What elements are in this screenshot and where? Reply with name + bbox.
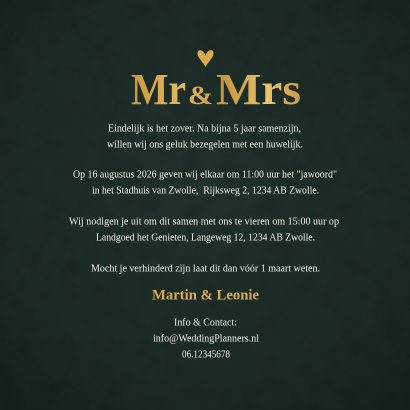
text block: ceremony details: Op 16 augustus 2026 geven wij elkaar om 11:00 uur het "jawoord" xyxy=(73,170,337,180)
text block: contact: 06.12345678 xyxy=(182,350,230,360)
text block: ceremony details: in het Stadhuis van Zwolle, Rijksweg 2, 1234 AB Zwolle. xyxy=(92,186,319,196)
text block: ceremony details xyxy=(73,170,337,196)
text block: party details xyxy=(69,216,339,244)
text block: contact xyxy=(153,318,259,360)
title: Mr & Mrs xyxy=(131,65,301,114)
names: Martin & Leonie: Martin & Leonie xyxy=(152,288,260,304)
text block: announcement xyxy=(107,124,303,150)
text block: announcement: willen wij ons geluk bezegelen met een huwelijk. xyxy=(107,140,303,150)
text block: contact: Info & Contact: xyxy=(174,318,237,328)
text block: party details: Landgoed het Genieten, Langeweg 12, 1234 AB Zwolle. xyxy=(96,232,315,244)
text block: RSVP: Mocht je verhinderd zijn laat dit dan vóór 1 maart weten. xyxy=(91,264,320,274)
title: Mr & Mrs: Mr xyxy=(131,65,186,114)
title: Mr & Mrs: & xyxy=(188,81,213,110)
text block: announcement: Eindelijk is het zover. Na bijna 5 jaar samenzijn, xyxy=(108,124,301,134)
text block: contact: info@WeddingPlanners.nl xyxy=(153,334,259,344)
icon: gold heart xyxy=(198,50,214,67)
title: Mr & Mrs: Mrs xyxy=(216,65,301,114)
text block: party details: Wij nodigen je uit om dit samen met ons te vieren om 15:00 uur op xyxy=(69,216,339,228)
